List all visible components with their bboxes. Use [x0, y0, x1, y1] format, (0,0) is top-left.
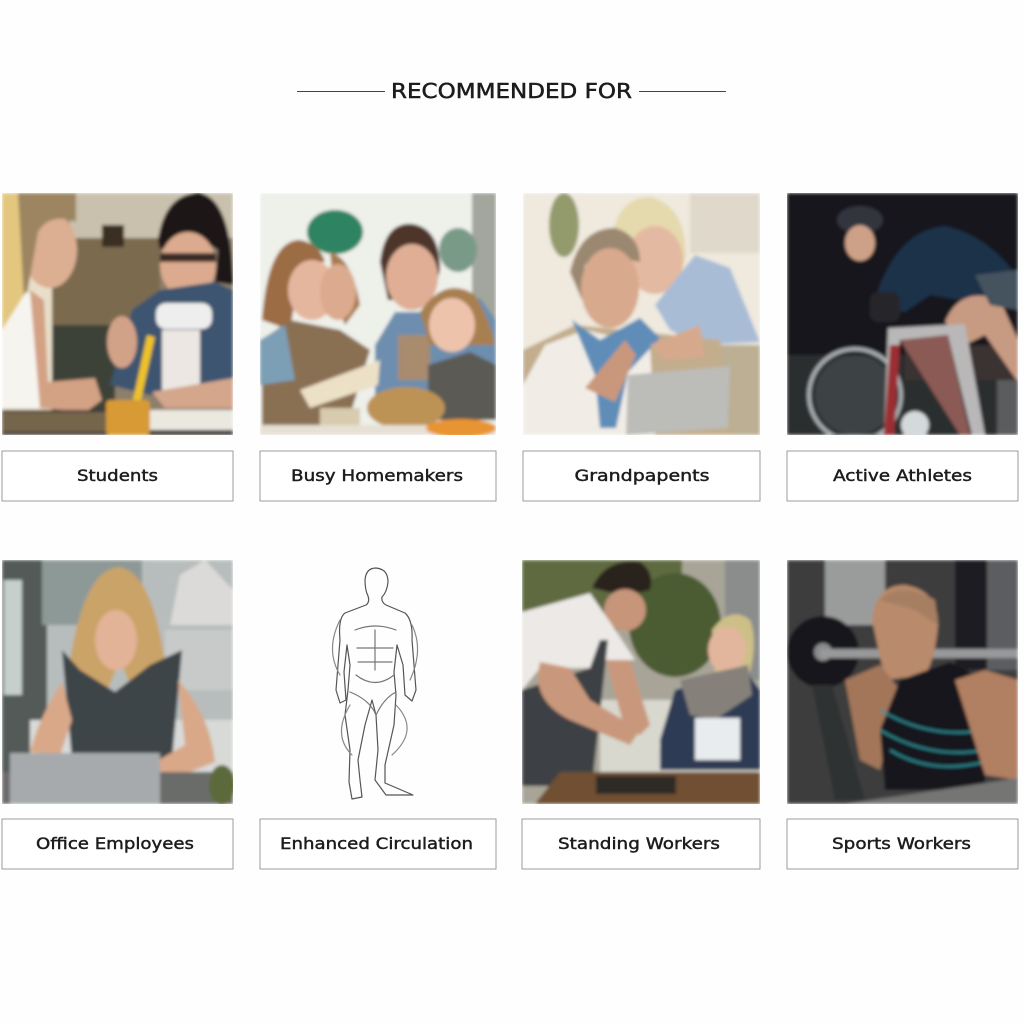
photo: busy homemakers: [260, 193, 496, 437]
label: grandparents: [523, 451, 760, 501]
photo: standing workers: [522, 560, 760, 804]
label: sports workers: [787, 819, 1018, 869]
label: active athletes: Active Athletes: [833, 466, 972, 485]
photo: active athletes: [787, 193, 1018, 441]
label: sports workers: Sports Workers: [832, 834, 971, 853]
photo: office employees: [2, 560, 235, 805]
label: students: [2, 451, 233, 501]
label: office employees: [2, 819, 233, 869]
label: busy homemakers: [260, 451, 496, 501]
photo: students: [2, 193, 233, 435]
label: standing workers: Standing Workers: [558, 834, 720, 853]
label: standing workers: [522, 819, 760, 869]
photo: sports workers: [787, 560, 1018, 804]
label: active athletes: [787, 451, 1018, 501]
title: RECOMMENDED FOR: [391, 79, 632, 103]
label: office employees: Office Employees: [36, 834, 194, 853]
label: busy homemakers: Busy Homemakers: [291, 466, 463, 485]
photo: grandparents: [523, 193, 760, 435]
illustration: body outline with circulation: [332, 568, 418, 799]
label: enhanced circulation: Enhanced Circulation: [280, 834, 473, 853]
label: grandparents: Grandpapents: [574, 466, 710, 485]
label: enhanced circulation: [260, 819, 496, 869]
label: students: Students: [77, 466, 158, 485]
